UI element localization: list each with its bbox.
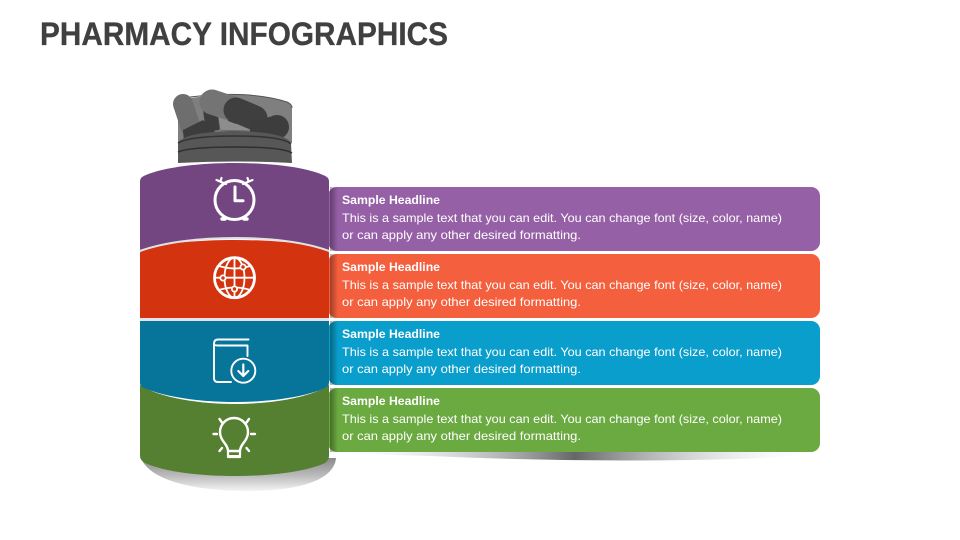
panel: purple row	[328, 187, 820, 251]
panel: orange row	[328, 254, 820, 318]
panel: blue row: or can apply any other desired formatting.	[342, 362, 581, 376]
panel: green row: This is a sample text that you can edit. You can change font (size, color, name)	[342, 412, 782, 426]
icon: light bulb	[214, 418, 255, 457]
panel: orange row: Sample Headline	[342, 260, 440, 274]
panel: blue row: This is a sample text that you can edit. You can change font (size, color, name)	[342, 345, 782, 359]
capsule: flat pale	[218, 116, 252, 131]
icon: book with download arrow	[214, 340, 255, 383]
panel: green row	[328, 388, 820, 452]
icon: pill bottle neck with capsules	[178, 94, 292, 163]
panel: green row: or can apply any other desired formatting.	[342, 429, 581, 443]
panel shadow	[330, 451, 820, 460]
panel: green row: Sample Headline	[342, 394, 440, 408]
capsule: large	[212, 98, 255, 124]
bottle segment: red	[140, 240, 329, 321]
panel: blue row	[328, 321, 820, 385]
bottle glass	[178, 95, 292, 143]
icon: globe	[214, 258, 254, 298]
panel: orange row: or can apply any other desired formatting.	[342, 295, 581, 309]
panel: purple row: This is a sample text that you can edit. You can change font (size, color, name)	[342, 211, 782, 225]
panel: orange row: This is a sample text that you can edit. You can change font (size, color, name)	[342, 278, 782, 292]
panel: blue row: Sample Headline	[342, 327, 440, 341]
capsule: middle dark	[203, 110, 222, 132]
panel: purple row: or can apply any other desired formatting.	[342, 228, 581, 242]
base shadow	[141, 458, 336, 491]
icon: alarm clock	[215, 178, 254, 220]
title: PHARMACY INFOGRAPHICS	[40, 16, 448, 52]
bottle segment: purple	[140, 163, 329, 251]
panel: purple row: Sample Headline	[342, 193, 440, 207]
bottle segment: blue	[140, 321, 329, 404]
bottle neck	[178, 131, 292, 163]
bottle segment: green	[140, 385, 329, 476]
capsule: left	[183, 104, 215, 142]
capsule: right dark	[265, 115, 289, 139]
